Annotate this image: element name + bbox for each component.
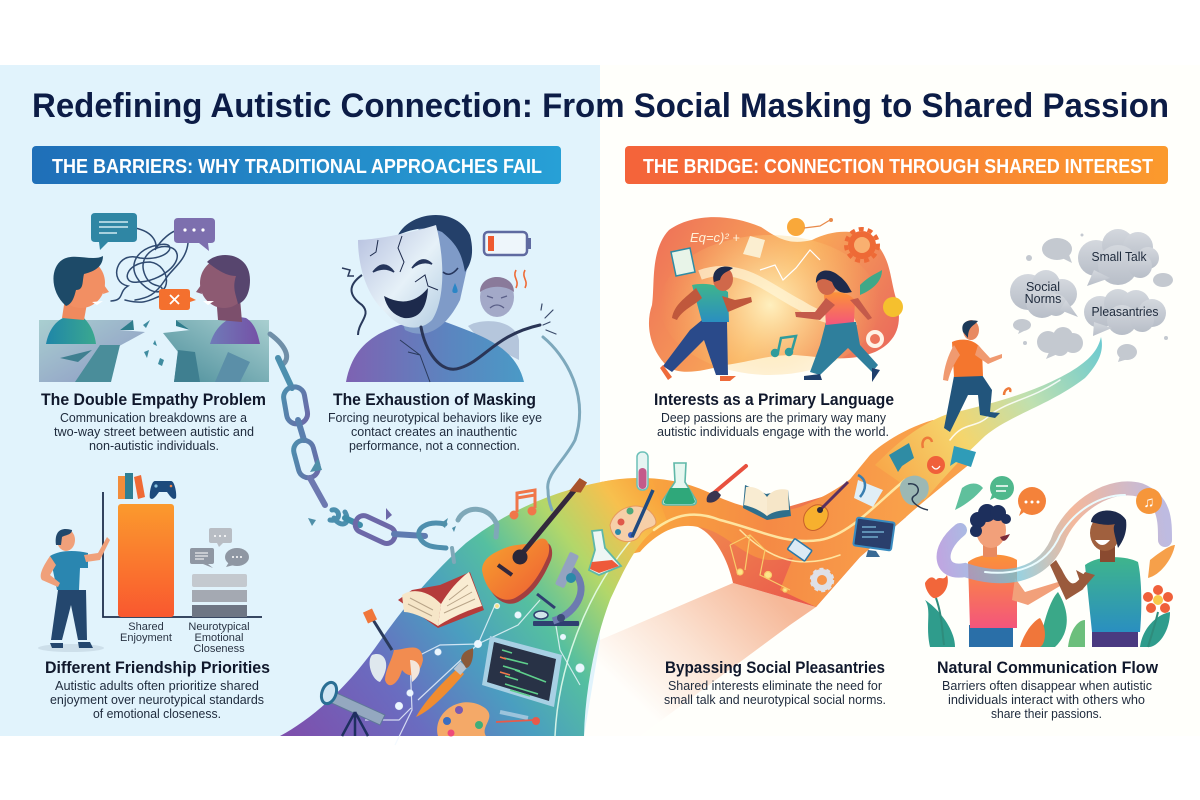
heading: The Exhaustion of Masking: [333, 391, 536, 409]
person: tired body: [346, 215, 524, 382]
bar labels: [120, 621, 250, 655]
icon: orange speech bubble: [1018, 487, 1046, 516]
icon: red pin: [496, 717, 540, 725]
arch underside: [698, 480, 906, 607]
icon: chat bubbles: [190, 528, 249, 568]
icon: leaf: [860, 270, 882, 295]
person: laughing left: [968, 504, 1060, 647]
illustration: person climbing toward clouds: [943, 229, 1173, 432]
icon: gear: [811, 569, 833, 591]
icon: guitar: [482, 480, 585, 604]
bar: shared enjoyment: [118, 504, 174, 617]
icon: keyboard: [787, 539, 812, 561]
illustration: cracked mask and drained person: [342, 215, 580, 510]
cloud: social norms: Norms: [1025, 292, 1061, 306]
icon: red paintbrush: [707, 466, 746, 503]
bridge of shared interests: [280, 337, 1102, 745]
description: individuals interact with others who: [948, 693, 1145, 707]
bridge icons: [319, 388, 1010, 736]
tail rising to clouds: [875, 337, 1102, 500]
illustration: colourful interest blob: [649, 217, 903, 382]
panel: double empathy problem: [39, 213, 269, 453]
heading: Interests as a Primary Language: [654, 391, 894, 409]
icon: teal speech bubble: [91, 213, 137, 250]
bar labels: Enjoyment: [120, 632, 172, 644]
heading: The Double Empathy Problem: [41, 391, 266, 409]
panel: different friendship priorities: [38, 473, 270, 721]
section header: barriers: THE BARRIERS: WHY TRADITIONAL APPROACHES FAIL: [52, 156, 542, 178]
description: performance, not a connection.: [349, 439, 520, 453]
heading: Bypassing Social Pleasantries: [665, 659, 885, 677]
icon: flowing ribbon: [700, 271, 855, 322]
illustration: two people over a chasm: [39, 213, 269, 382]
icon: low battery: [484, 232, 531, 255]
icon: orange tool and butterfly: [363, 608, 423, 685]
description: share their passions.: [991, 707, 1102, 721]
description: [328, 411, 542, 453]
constellation network: [365, 600, 584, 745]
description: [657, 411, 889, 439]
description: [664, 679, 886, 707]
description: autistic individuals engage with the world.: [657, 425, 889, 439]
bar labels: Emotional: [195, 632, 243, 644]
icon: smile: [927, 456, 945, 474]
panel: exhaustion of masking: [328, 215, 580, 510]
bar labels: Shared: [128, 621, 164, 633]
person: small exhausted figure: [468, 270, 526, 360]
icon: music bubble: ♫: [1143, 494, 1155, 511]
icon: monitor small: [853, 517, 895, 557]
icon: green flask: [662, 463, 696, 505]
person: left: [46, 256, 109, 344]
person: right: [196, 255, 260, 344]
icon: sun circle: [787, 218, 833, 236]
section header: bridge: THE BRIDGE: CONNECTION THROUGH SHARED INTEREST: [643, 156, 1153, 178]
bar: neurotypical emotional closeness: [192, 574, 247, 617]
arch right span: [601, 460, 944, 560]
description: [54, 411, 254, 453]
cloud: small talk: Small Talk: [1092, 250, 1147, 264]
panel: barriers background: [0, 65, 600, 736]
icon: blue speech tile: [950, 446, 976, 467]
icon: palette: [437, 702, 489, 736]
description: Barriers often disappear when autistic: [942, 679, 1152, 693]
description: [942, 679, 1152, 721]
icon: red flask: [589, 530, 621, 575]
icon: open book left: [398, 572, 484, 628]
icon: orange gear: [846, 229, 878, 261]
section header: bridge: [625, 146, 1168, 184]
person pointing at chart: [38, 529, 110, 652]
icon: teal speech tile: [889, 443, 914, 472]
cloud: social norms: [1010, 270, 1078, 318]
bar labels: Neurotypical: [188, 621, 250, 633]
icon: green speech bubble: [990, 476, 1014, 500]
icon: purple speech bubble: [174, 218, 215, 251]
glowing inner strands: [555, 380, 1060, 736]
icon: game controller: [150, 481, 176, 499]
description: small talk and neurotypical social norms.: [664, 693, 886, 707]
right leg descending band: [780, 420, 971, 607]
icon: music bubble: [1136, 488, 1162, 514]
panel: natural communication flow: [925, 476, 1175, 721]
description: Communication breakdowns are a: [60, 411, 247, 425]
icon: orange squiggles on path: [922, 388, 1010, 448]
swirl of shared passion: [944, 488, 1165, 576]
description: two-way street between autistic and: [54, 425, 254, 439]
description: Autistic adults often prioritize shared: [55, 679, 259, 693]
blob background: [649, 217, 899, 372]
description: [50, 679, 264, 721]
icon: line chart: [760, 250, 820, 280]
arch left leg: [280, 479, 668, 736]
icon: brain cloud: [900, 476, 929, 510]
title: Redefining Autistic Connection: From Social Masking to Shared Passion: [32, 87, 1169, 125]
icon: frayed cable: [421, 304, 580, 510]
description: contact creates an inauthentic: [351, 425, 517, 439]
icon: music note: [511, 490, 535, 518]
icon: note cards: [671, 236, 765, 276]
icon: code monitor: [482, 636, 562, 718]
panel: bridge background: [600, 65, 1200, 736]
cloud: social norms: Social: [1026, 280, 1060, 294]
icon: open book right: [743, 485, 791, 520]
bar chart: [103, 473, 262, 655]
icon: formula: Eq=c)² +: [690, 230, 740, 245]
description: non-autistic individuals.: [89, 439, 219, 453]
icon: breaking chain: [270, 334, 497, 562]
axes: [103, 492, 262, 617]
icon: books: [118, 473, 145, 499]
faded beam under arch: [584, 583, 816, 736]
icon: cracked ground: [39, 320, 269, 382]
icon: music note: [772, 336, 796, 356]
icon: orange error box: [159, 289, 196, 310]
underside constellation: [730, 535, 790, 592]
person: right runner: [795, 270, 880, 382]
icon: tangled communication lines: [111, 228, 188, 302]
description: Shared interests eliminate the need for: [668, 679, 882, 693]
icon: test tube: [637, 452, 648, 490]
cloud: small talk: [1078, 229, 1159, 286]
panel: interests as a primary language: [649, 217, 903, 439]
icon: microscope: [533, 552, 581, 626]
person: climber: [943, 320, 1002, 432]
person: laughing right: [1050, 510, 1141, 647]
cloud: pleasantries: [1084, 289, 1166, 336]
icon: paintbrush: [416, 648, 473, 717]
icon: palette with blue brush: [610, 490, 656, 542]
icon: telescope: [319, 680, 385, 736]
icon: yellow badge: [883, 297, 903, 317]
icon: small guitar: [804, 482, 848, 531]
illustration: two people talking among plants: [925, 476, 1175, 647]
chain shards: [308, 458, 456, 532]
icon: theatre mask: [342, 225, 442, 335]
heading: Natural Communication Flow: [937, 659, 1158, 677]
section header: barriers: [32, 146, 561, 184]
small grey clouds: [1013, 234, 1173, 362]
person: left runner: [660, 267, 752, 381]
plants: [925, 484, 1175, 647]
icon: paper and quill: [854, 475, 883, 507]
description: Deep passions are the primary way many: [661, 411, 887, 425]
bar labels: Closeness: [193, 643, 245, 655]
icon: white gear: [868, 332, 882, 346]
panel: bypassing social pleasantries: [664, 229, 1173, 707]
description: Forcing neurotypical behaviors like eye: [328, 411, 542, 425]
blob glow: [660, 235, 880, 375]
description: enjoyment over neurotypical standards: [50, 693, 264, 707]
description: of emotional closeness.: [93, 707, 221, 721]
heading: Different Friendship Priorities: [45, 659, 270, 677]
cloud: pleasantries: Pleasantries: [1092, 305, 1158, 319]
